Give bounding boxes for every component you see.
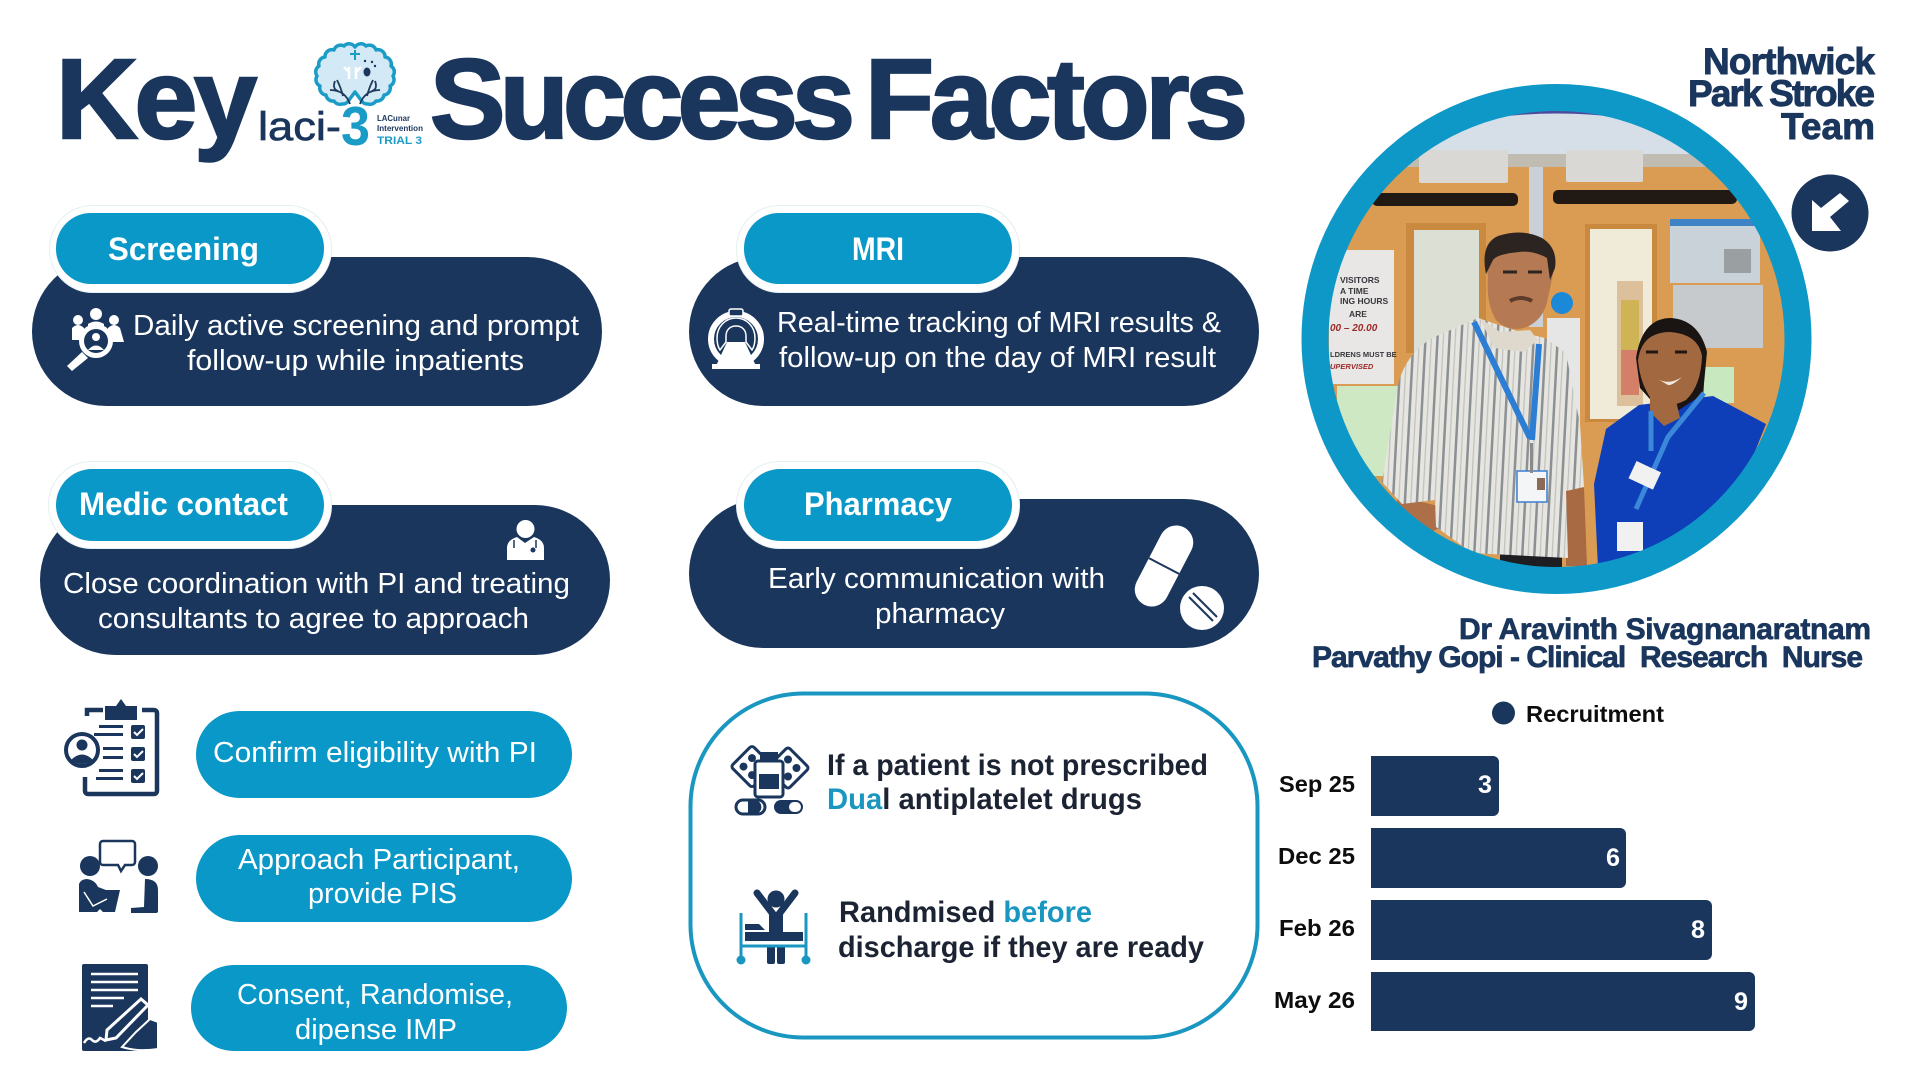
tag: Medic contact — [48, 462, 332, 548]
caption: team names: Dr Aravinth Sivagnanaratnam — [1459, 613, 1871, 646]
bar: May 26: 9 — [1734, 988, 1748, 1016]
bar: Dec 25 — [1278, 828, 1626, 888]
tag: MRI — [736, 206, 1020, 292]
text: screening description: follow-up while inpatients — [187, 345, 524, 377]
text: MRI description — [777, 307, 1221, 374]
text: randomised line: discharge if they are ready — [838, 931, 1204, 964]
person: man in striped shirt — [1382, 232, 1587, 569]
logo caption: Intervention: Intervention — [377, 123, 423, 133]
step icon: signing a document — [82, 964, 158, 1051]
text: prescribed line — [827, 749, 1208, 816]
icon: screening people with magnifier — [67, 308, 124, 371]
panel: Pharmacy — [689, 462, 1259, 648]
title word: Success: Success — [430, 36, 855, 162]
photo notice text: 00 – 20.00 — [1330, 323, 1378, 334]
tag: Pharmacy — [736, 462, 1020, 548]
icon: medication packs — [731, 745, 809, 814]
text: screening description — [133, 310, 579, 377]
bar: Sep 25 — [1279, 756, 1499, 816]
caption: team names: Parvathy Gopi - Clinical Research Nurse — [1312, 641, 1863, 674]
photo notice text: A TIME — [1340, 286, 1369, 296]
title — [56, 36, 1248, 162]
icon: doctor — [507, 520, 544, 560]
photo notice text: ARE — [1349, 309, 1367, 319]
heading: Northwick Park Stroke Team: Park Stroke — [1688, 73, 1875, 114]
text: prescribed line: If a patient is not prescribed — [827, 749, 1208, 782]
step: Approach Participant — [196, 835, 572, 922]
bar: Feb 26: Feb 26 — [1279, 915, 1355, 941]
text: randomised line — [838, 896, 1204, 964]
text: MRI description: Real-time tracking of MRI results & — [777, 307, 1221, 339]
text: pharmacy description — [768, 563, 1105, 630]
text: medic description: consultants to agree to approach — [98, 603, 529, 635]
bar: Dec 25: 6 — [1606, 844, 1620, 872]
text: pharmacy description: Early communication with — [768, 563, 1105, 595]
bar: Feb 26: 8 — [1691, 916, 1705, 944]
panel: Screening — [32, 206, 602, 406]
step: Consent, Randomise — [191, 965, 567, 1051]
photo notice text: UPERVISED — [1330, 362, 1374, 371]
text: medic description: Close coordination with PI and treating — [63, 568, 570, 600]
caption: team names — [1312, 613, 1871, 674]
heading: Northwick Park Stroke Team — [1688, 41, 1875, 147]
person: woman in blue top — [1594, 318, 1766, 568]
photo notice text: LDRENS MUST BE — [1330, 350, 1397, 359]
bar: Dec 25: Dec 25 — [1278, 843, 1355, 869]
icon: brain — [316, 44, 394, 104]
chart: recruitment bars — [1274, 701, 1755, 1031]
tag: Pharmacy: Pharmacy — [804, 486, 952, 522]
logo numeral: 3: 3 — [341, 95, 370, 157]
photo notice text: ING HOURS — [1340, 296, 1388, 306]
logo text: laci-: laci- — [258, 105, 341, 149]
step: Approach Participant: provide PIS — [308, 878, 457, 910]
bar: Sep 25: Sep 25 — [1279, 771, 1355, 797]
step icon: clipboard with person — [66, 699, 157, 794]
legend: Recruitment — [1526, 701, 1664, 727]
tag: MRI: MRI — [852, 231, 904, 267]
tag: Screening — [50, 206, 332, 292]
icon: arrow pointing to photo — [1792, 174, 1868, 252]
step: Confirm eligibility — [196, 711, 572, 798]
panel: Medic contact — [40, 462, 610, 655]
text: screening description: Daily active screening and prompt — [133, 310, 579, 342]
step icon: two people talking — [79, 841, 158, 913]
bar: Feb 26 — [1279, 900, 1712, 960]
step: Approach Participant: Approach Participant, — [238, 844, 520, 876]
logo caption: LACunar: LACunar — [377, 113, 411, 123]
bar: May 26 — [1274, 972, 1755, 1031]
panel: MRI — [689, 206, 1259, 406]
step: Consent, Randomise: Consent, Randomise, — [237, 979, 513, 1011]
icon: MRI scanner — [711, 309, 761, 369]
text: medic description — [63, 568, 570, 635]
bar: May 26: May 26 — [1274, 987, 1355, 1013]
icon: patient rising from bed — [736, 890, 810, 964]
icon: capsule and tablet — [1129, 520, 1224, 630]
text: randomised line: Randmised before — [839, 896, 1092, 929]
text: pharmacy description: pharmacy — [875, 598, 1006, 630]
title word: Factors: Factors — [865, 36, 1248, 162]
text: MRI description: follow-up on the day of MRI result — [779, 342, 1216, 374]
title word: Key: Key — [56, 36, 257, 162]
logo caption: TRIAL 3: TRIAL 3 — [377, 135, 422, 147]
heading: Northwick Park Stroke Team: Team — [1781, 106, 1875, 147]
panel: dual antiplatelet callout — [690, 694, 1258, 1038]
photo notice text — [1330, 275, 1397, 371]
logo: laci-3 — [258, 44, 423, 157]
tag: Medic contact: Medic contact — [79, 486, 288, 522]
step: Confirm eligibility: Confirm eligibility with PI — [213, 737, 537, 769]
heading: Northwick Park Stroke Team: Northwick — [1703, 41, 1875, 82]
tag: Screening: Screening — [108, 231, 259, 267]
photo: team in circular frame — [1315, 98, 1800, 580]
text: prescribed line: Dual antiplatelet drugs — [827, 783, 1142, 816]
bar: Sep 25: 3 — [1478, 771, 1492, 799]
step: Consent, Randomise: dipense IMP — [295, 1014, 457, 1046]
photo notice text: VISITORS — [1340, 275, 1380, 285]
